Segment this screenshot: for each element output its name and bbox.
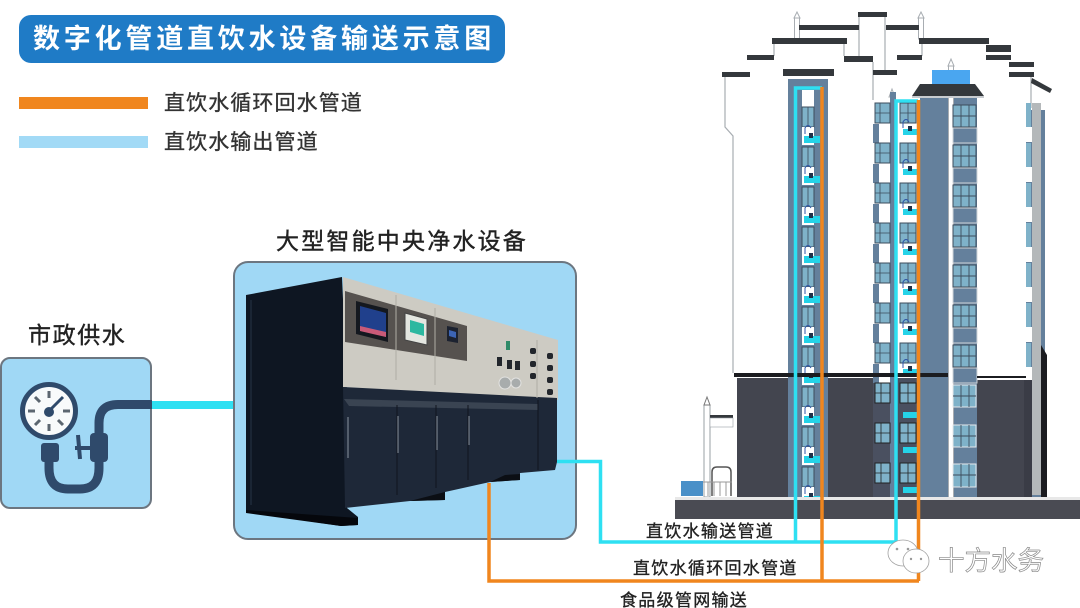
roof tiles <box>722 12 1052 93</box>
pipes inside the building <box>796 87 918 581</box>
watermark: 十方水务 <box>938 546 1044 576</box>
heading: purifier: 大型智能中央净水设备 <box>276 228 528 254</box>
right side tower <box>1024 103 1047 500</box>
label: delivery pipe: 直饮水输送管道 <box>646 522 774 541</box>
title <box>19 15 505 63</box>
legend: 直饮水输出管道 <box>164 131 319 154</box>
machine illustration <box>246 277 558 526</box>
mid section white strip <box>897 100 918 373</box>
tower roof <box>912 70 984 98</box>
lower dark panels <box>737 378 1024 497</box>
tower windows <box>953 105 977 487</box>
building <box>675 12 1080 581</box>
tower column <box>920 97 948 500</box>
legend <box>19 92 363 154</box>
icon: pressure gauge and pipe <box>22 384 152 489</box>
pipes: feed from purifier to building <box>489 462 919 581</box>
heading: municipal water: 市政供水 <box>28 322 126 348</box>
eave band <box>734 373 948 377</box>
panel: central water purifier <box>234 262 576 539</box>
panel: municipal water supply <box>1 358 152 508</box>
small gate <box>681 397 733 497</box>
mid column units <box>873 103 917 493</box>
display screens <box>356 301 458 345</box>
title: 数字化管道直饮水设备输送示意图 <box>33 24 495 54</box>
label: return pipe: 直饮水循环回水管道 <box>633 559 798 578</box>
control buttons <box>497 341 553 395</box>
ground base <box>675 497 1080 500</box>
legend: 直饮水循环回水管道 <box>164 92 363 115</box>
left column units <box>802 107 820 505</box>
watermark <box>888 540 1044 576</box>
left facade column <box>788 79 828 500</box>
chimneys <box>794 12 954 500</box>
pipe: municipal supply to purifier <box>152 401 234 409</box>
wall outline <box>725 17 1031 373</box>
